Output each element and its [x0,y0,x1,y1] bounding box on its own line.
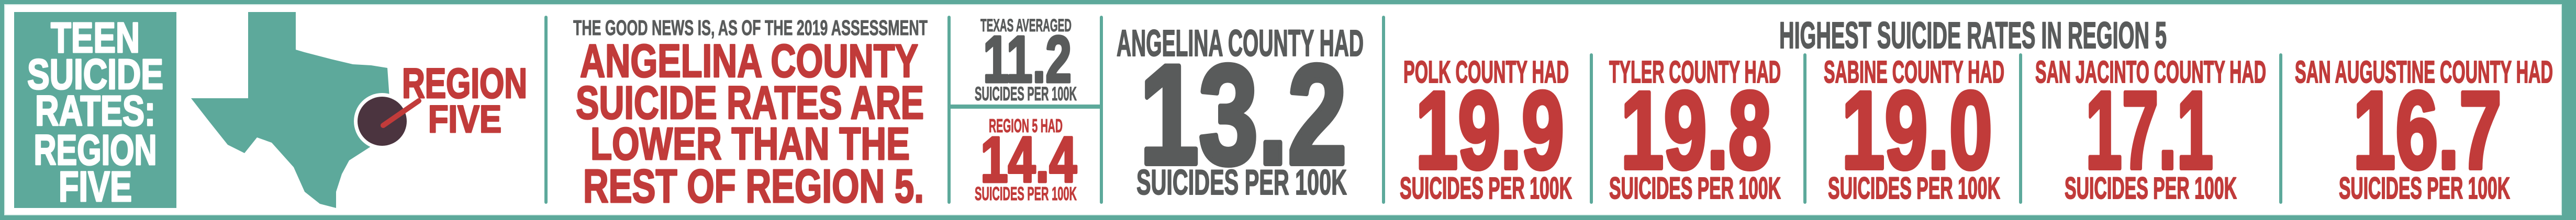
text block: good news statement: ANGELINA COUNTY [580,34,918,87]
stat: region 5: SUICIDES PER 100K [975,183,1077,204]
stat: sabine county: SUICIDES PER 100K [1828,171,2000,205]
stat: san augustine county: 16.7 [2353,68,2502,192]
stat: san jacinto county: 17.1 [2086,68,2213,192]
stat: texas average: TEXAS AVERAGED [980,16,1072,36]
stat: sabine county: SABINE COUNTY HAD [1824,55,2004,89]
stat: polk county: 19.9 [1415,68,1564,192]
panel: title box: SUICIDE [27,51,163,98]
text block: good news statement: SUICIDE RATES ARE [576,76,924,129]
stat: angelina county: 13.2 [1140,36,1347,194]
panel: title box: TEEN [51,14,140,62]
stat: angelina county [1117,23,1364,202]
text block: good news statement: LOWER THAN THE [590,119,910,169]
stat: tyler county: SUICIDES PER 100K [1609,171,1781,205]
stat: sabine county [1824,55,2004,205]
panel: title box: RATES: [35,87,155,135]
stat: tyler county: 19.8 [1621,68,1771,192]
icon: texas map with region five marker: REGION [402,60,527,107]
stat: region 5 [975,115,1077,204]
heading: highest suicide rates: HIGHEST SUICIDE RATES IN REGION 5 [1779,15,2167,56]
stat: texas average [975,16,1077,105]
stat: polk county [1400,55,1572,205]
stat: tyler county [1609,55,1781,205]
stat: texas average: 11.2 [983,22,1072,96]
icon: texas map with region five marker [191,12,527,208]
text block: good news statement: REST OF REGION 5. [583,160,924,213]
stat: polk county: SUICIDES PER 100K [1400,171,1572,205]
stat: san jacinto county: SAN JACINTO COUNTY HAD [2035,55,2266,89]
stat: san jacinto county [2035,55,2266,205]
stat: angelina county: ANGELINA COUNTY HAD [1117,23,1364,64]
panel: title box [14,12,176,211]
panel: title box: FIVE [59,163,132,211]
text block: good news statement: THE GOOD NEWS IS, AS OF THE 2019 ASSESSMENT [573,16,928,40]
panel: title box: REGION [34,126,157,174]
stat: polk county: POLK COUNTY HAD [1403,55,1569,89]
icon: texas map with region five marker: FIVE [428,98,501,141]
stat: region 5: REGION 5 HAD [989,115,1063,136]
stat: san jacinto county: SUICIDES PER 100K [2065,171,2237,205]
stat: sabine county: 19.0 [1842,68,1992,192]
stat: region 5: 14.4 [980,124,1077,196]
stat: texas average: SUICIDES PER 100K [975,83,1077,105]
stat: san augustine county [2295,55,2553,205]
stat: angelina county: SUICIDES PER 100K [1136,163,1347,202]
text block: good news statement [573,16,928,213]
stat: tyler county: TYLER COUNTY HAD [1609,55,1781,89]
